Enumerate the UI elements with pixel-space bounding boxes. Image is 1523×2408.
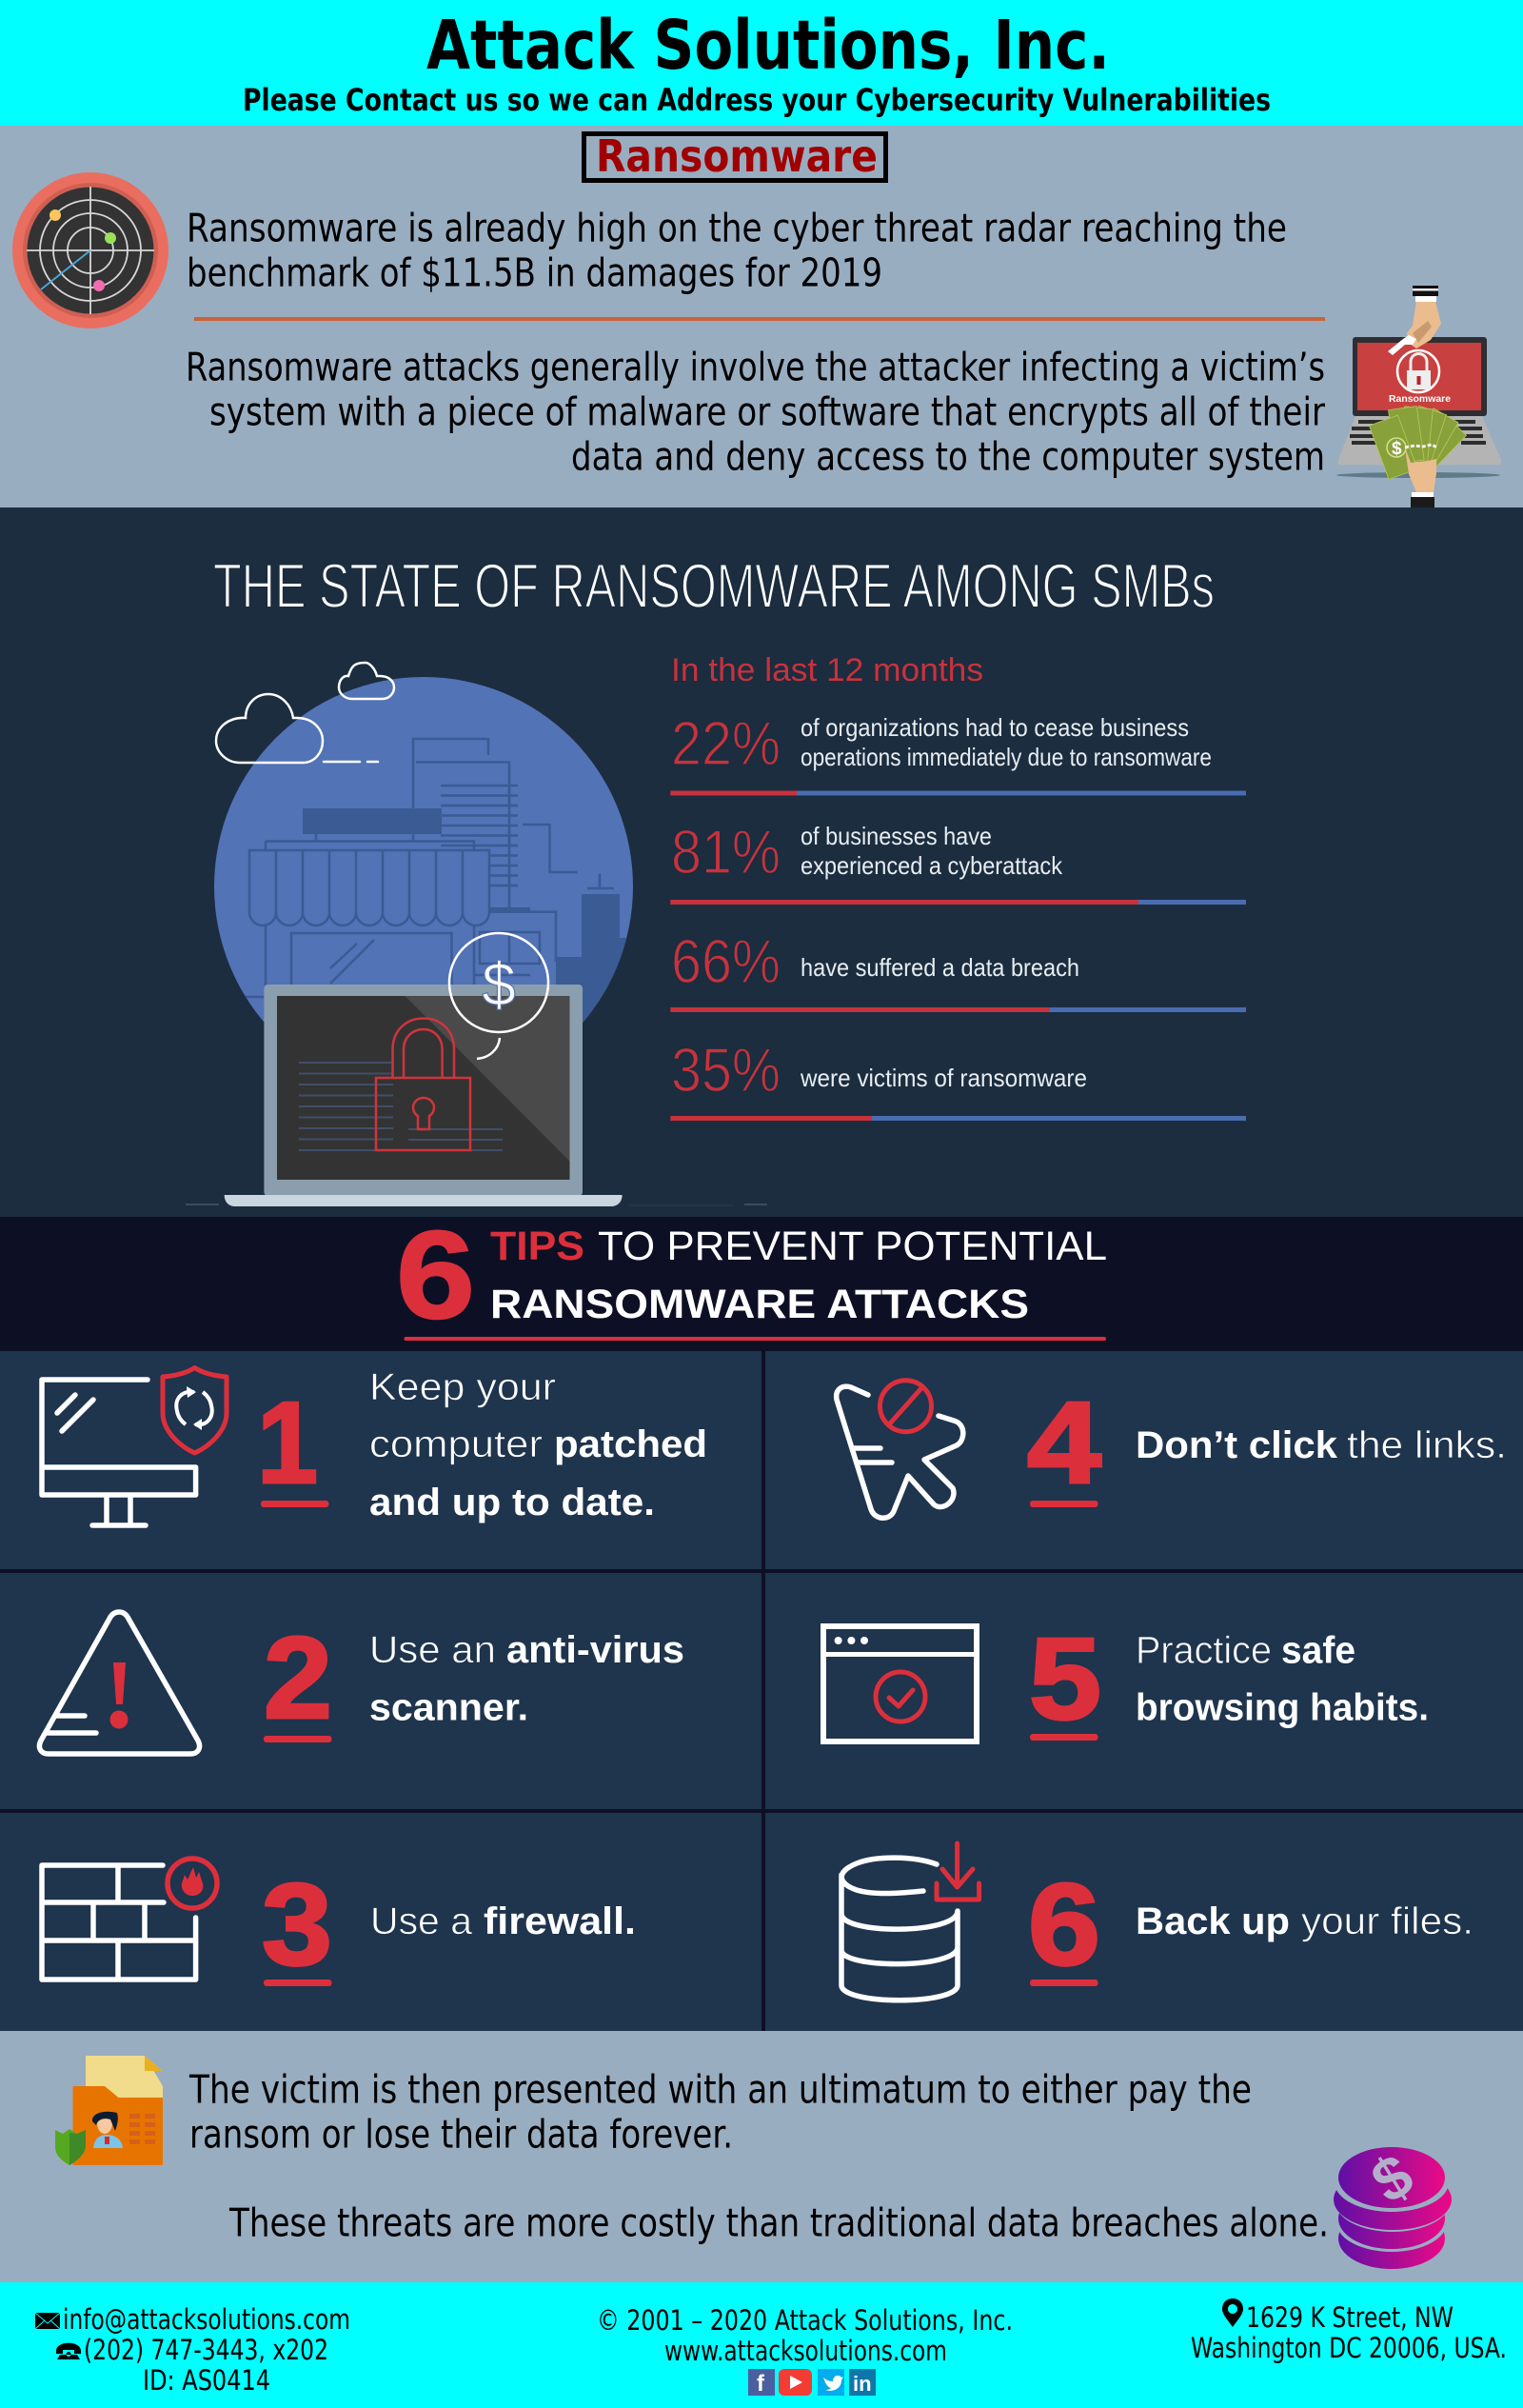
panel: state of ransomware xyxy=(0,507,1523,1217)
tip 5: 5 xyxy=(1029,1614,1101,1743)
tip 2: anti-virus xyxy=(506,1629,684,1671)
copyright column xyxy=(597,2304,1013,2397)
icon: location pin xyxy=(1222,2299,1243,2327)
icons: social media: in xyxy=(853,2372,872,2396)
icon: padlock xyxy=(376,1019,470,1150)
icon: radar xyxy=(12,172,168,328)
tip 1 xyxy=(42,1366,707,1525)
stat: 81%: 81% xyxy=(671,817,781,886)
icon: dollar bubble: $ xyxy=(482,950,516,1019)
icon: ransomware laptop with hands xyxy=(1336,286,1501,507)
stat: 22% xyxy=(670,708,1246,796)
icons: social media xyxy=(748,2369,876,2397)
tip 6 xyxy=(841,1843,1474,2000)
icon: envelope xyxy=(35,2313,60,2329)
stat: 81%: of businesses have xyxy=(801,822,992,850)
icon: warning triangle xyxy=(39,1612,200,1754)
tip 3 xyxy=(42,1859,636,1989)
tip 3: Use a xyxy=(370,1901,473,1942)
heading: Ransomware: Ransomware xyxy=(596,130,878,182)
title: Attack Solutions, Inc. xyxy=(426,6,1110,85)
stat: 35% xyxy=(670,1035,1246,1121)
tip 5 xyxy=(823,1614,1429,1743)
tip 1: Keep your xyxy=(369,1366,556,1408)
laptop xyxy=(186,985,767,1206)
copyright column: www.attacksolutions.com xyxy=(664,2335,947,2367)
tip 5: safe xyxy=(1281,1630,1355,1672)
text: attack paragraph xyxy=(186,345,1325,480)
text: radar paragraph xyxy=(187,206,1287,295)
tip 1: and up to date. xyxy=(369,1482,655,1523)
icon: ransomware laptop with hands: $ xyxy=(1392,439,1402,459)
tips heading: TIPS xyxy=(490,1224,584,1269)
text: radar paragraph: benchmark of $11.5B in damages for 2019 xyxy=(187,249,882,295)
tips heading: TO PREVENT POTENTIAL xyxy=(598,1224,1107,1269)
tip 4: 4 xyxy=(1027,1378,1101,1507)
stat: 35%: were victims of ransomware xyxy=(800,1064,1087,1092)
tip 2 xyxy=(39,1612,684,1754)
tip 3: 3 xyxy=(262,1860,332,1989)
icon: firewall xyxy=(42,1859,217,1980)
icon: clouds xyxy=(216,663,394,763)
tip 2: Use an xyxy=(369,1629,496,1671)
tip 5: Practice xyxy=(1136,1630,1272,1672)
subtitle: Please Contact us so we can Address your Cybersecurity Vulnerabilities xyxy=(243,82,1271,118)
contact column xyxy=(35,2303,350,2397)
text: ultimatum: ransom or lose their data forever. xyxy=(189,2112,733,2158)
icon: coin stack: $ xyxy=(1359,2140,1425,2217)
text: attack paragraph: system with a piece of malware or software that encrypts all of their xyxy=(209,388,1325,434)
tip 1: computer xyxy=(369,1423,543,1465)
stat: 66% xyxy=(670,926,1246,1012)
panel: tips grid xyxy=(0,1351,1523,2031)
tip 4: the links. xyxy=(1347,1424,1507,1466)
icon: monitor with shield xyxy=(42,1367,227,1525)
panel: ransomware intro xyxy=(0,126,1523,507)
copyright column: © 2001 – 2020 Attack Solutions, Inc. xyxy=(597,2304,1013,2337)
text: radar paragraph: Ransomware is already high on the cyber threat radar reaching the xyxy=(187,206,1287,251)
stats heading: In the last 12 months xyxy=(671,652,983,688)
icons: social media: f xyxy=(757,2371,765,2397)
stat: 81%: experienced a cyberattack xyxy=(801,851,1063,880)
tips heading: RANSOMWARE ATTACKS xyxy=(490,1282,1029,1327)
tip 5: browsing habits. xyxy=(1136,1687,1429,1729)
stat: 22%: 22% xyxy=(671,708,781,778)
address column xyxy=(1191,2299,1507,2364)
tip 6: your files. xyxy=(1301,1901,1474,1942)
icon: dollar bubble xyxy=(449,933,548,1059)
big number 6: 6 xyxy=(396,1204,475,1344)
stat: 22%: of organizations had to cease business xyxy=(801,713,1189,742)
tip 1: 1 xyxy=(257,1378,318,1507)
icon: browser window with check xyxy=(823,1626,977,1741)
tip 2: scanner. xyxy=(369,1687,528,1729)
icon: database with download arrow xyxy=(841,1843,979,2000)
tip 3: firewall. xyxy=(484,1901,636,1942)
icon: coin stack xyxy=(1334,2140,1452,2269)
text: ultimatum xyxy=(188,2066,1252,2158)
stat: 22%: operations immediately due to ransomware xyxy=(801,743,1212,771)
stats xyxy=(670,652,1246,1121)
stat: 66%: have suffered a data breach xyxy=(801,953,1079,982)
stat: 35%: 35% xyxy=(671,1035,781,1104)
tip 1: patched xyxy=(554,1423,707,1465)
address column: 1629 K Street, NW xyxy=(1246,2301,1454,2334)
stat: 81% xyxy=(670,817,1246,905)
text: ultimatum: The victim is then presented with an ultimatum to either pay the xyxy=(188,2066,1252,2112)
tip 6: 6 xyxy=(1028,1860,1100,1989)
tips heading xyxy=(490,1224,1107,1327)
icon: ransomware laptop with hands: Ransomware xyxy=(1389,394,1451,405)
footer band xyxy=(0,2282,1523,2408)
contact column: info@attacksolutions.com xyxy=(63,2303,350,2336)
text: threats cost: These threats are more costly than traditional data breaches alone. xyxy=(228,2199,1329,2245)
tip 4: Don’t click xyxy=(1136,1424,1338,1466)
tip 4 xyxy=(837,1378,1507,1518)
icon: telephone xyxy=(56,2343,81,2359)
icon: folder with person and shield xyxy=(55,2056,163,2165)
panel: ultimatum xyxy=(0,2031,1523,2282)
contact column: ID: AS0414 xyxy=(143,2364,270,2397)
contact column: (202) 747-3443, x202 xyxy=(84,2334,328,2366)
icon: cursor with prohibit sign xyxy=(837,1381,963,1518)
header band xyxy=(0,0,1523,126)
stat: 66%: 66% xyxy=(671,926,781,996)
tip 2: 2 xyxy=(264,1613,332,1742)
illustration: laptop ransom over storefront xyxy=(186,663,767,1206)
tip 6: Back up xyxy=(1136,1901,1290,1942)
tips header band xyxy=(0,1204,1523,1351)
text: attack paragraph: data and deny access to the computer system xyxy=(571,434,1325,480)
